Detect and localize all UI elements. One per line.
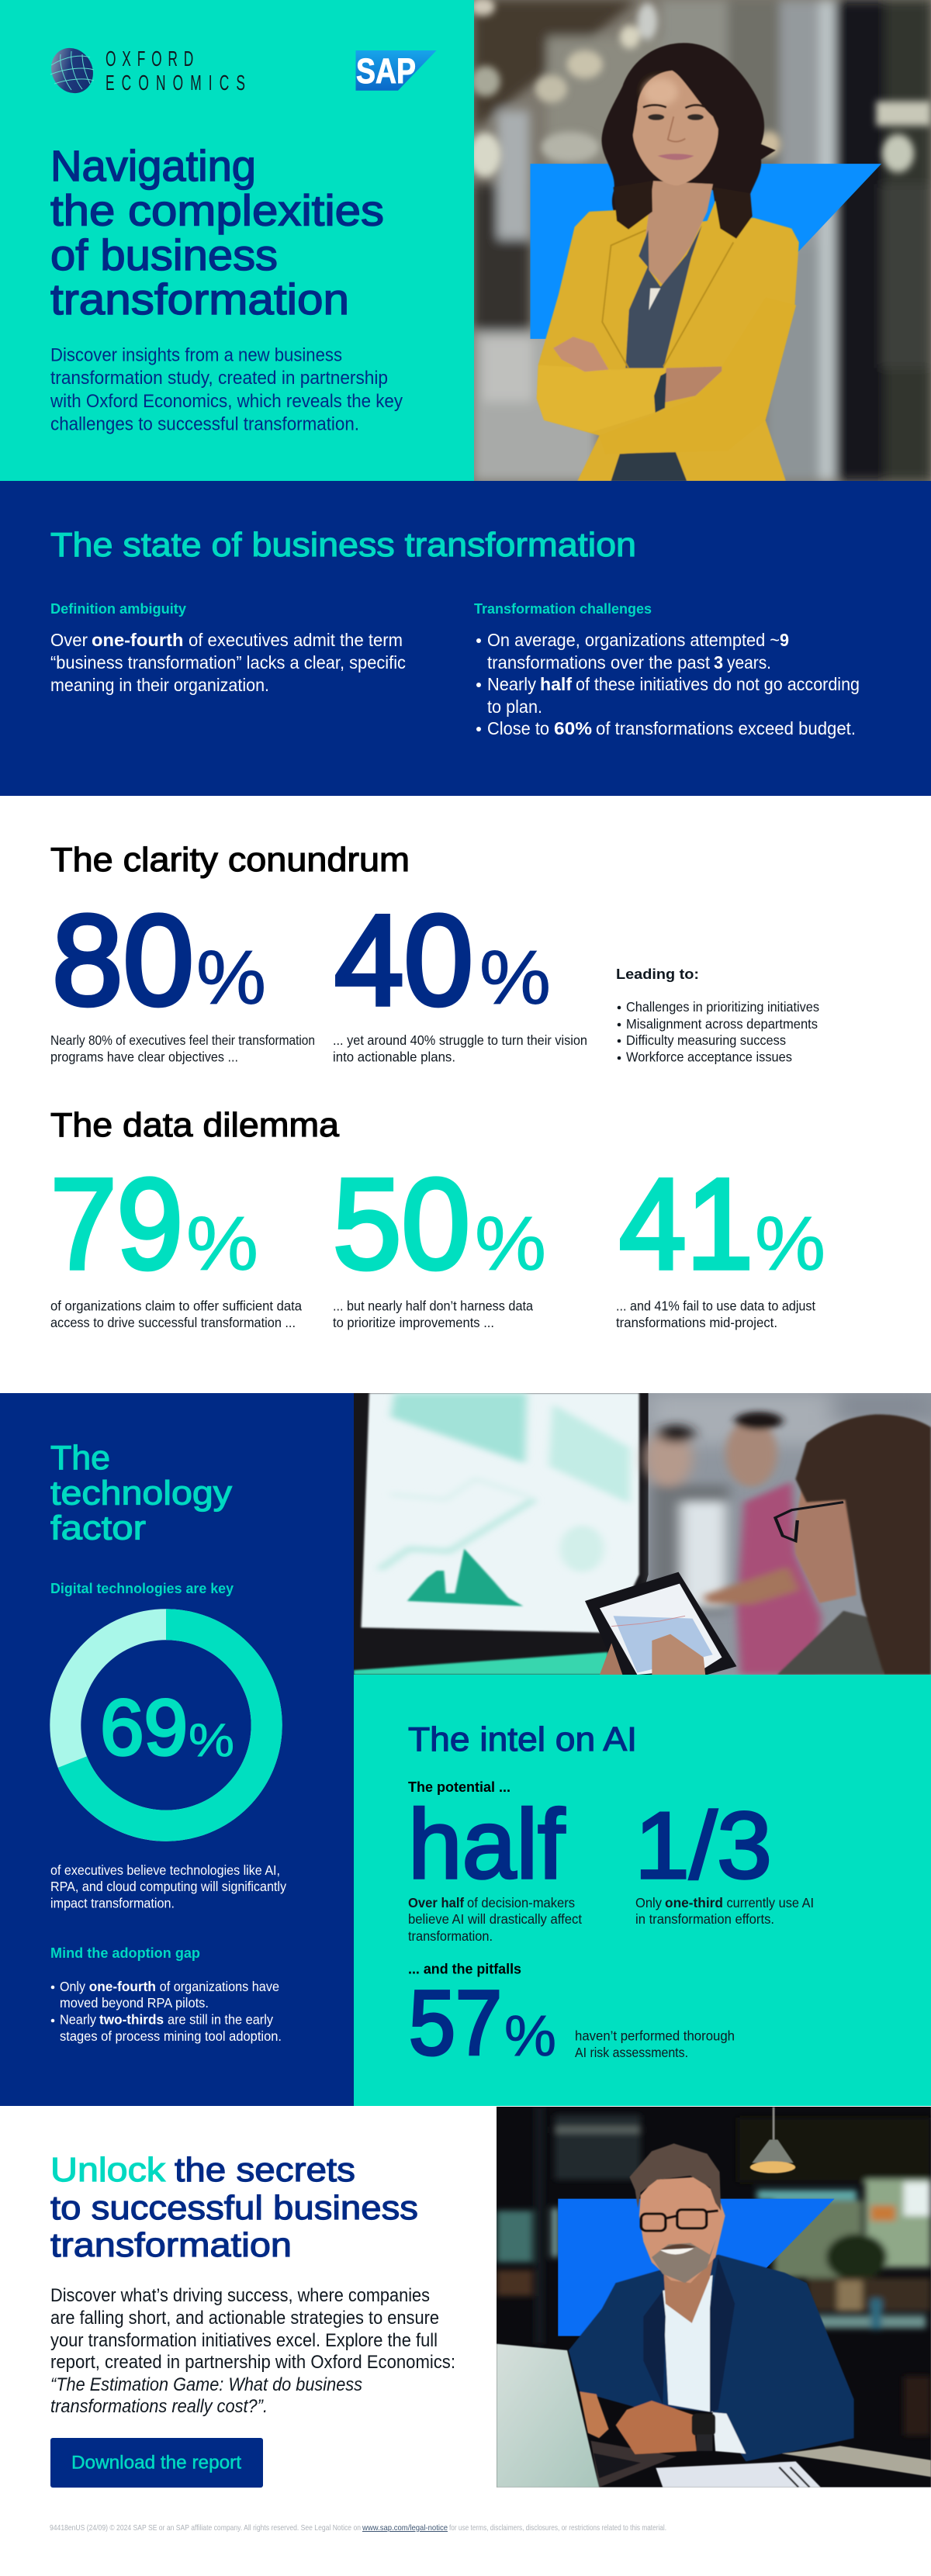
panel: the technology factor xyxy=(0,1393,354,2106)
heading: Unlock xyxy=(50,2151,166,2189)
person: front hair locks xyxy=(614,181,753,239)
donut chart: 69%: 69 xyxy=(100,1683,188,1772)
heading: The data dilemma xyxy=(50,1106,340,1144)
title: the complexities xyxy=(50,186,384,234)
stat: 50%: % xyxy=(475,1201,546,1286)
person: hands and watch xyxy=(580,2391,746,2454)
list: leading to xyxy=(616,966,819,1064)
stat: 80% xyxy=(50,889,315,1064)
intro paragraph: Discover insights from a new business xyxy=(50,344,342,366)
stat: 40%: 40 xyxy=(334,889,473,1032)
stat: half: Over half xyxy=(408,1895,464,1910)
list: adoption gap: moved beyond RPA pilots. xyxy=(60,1995,209,2011)
heading: technology xyxy=(50,1474,232,1513)
person: businesswoman xyxy=(537,43,799,481)
title: of business xyxy=(50,230,278,279)
heading: The xyxy=(50,1439,110,1477)
stat: 41%: 41 xyxy=(619,1153,753,1296)
person: neck xyxy=(646,181,713,285)
person: blouse xyxy=(611,226,702,481)
stat: 80%: Nearly 80% of executives feel their transformation xyxy=(50,1032,315,1048)
subheading: ... and the pitfalls xyxy=(408,1961,521,1976)
colleague in pink xyxy=(704,1412,822,1675)
text block: report description xyxy=(50,2285,455,2417)
stat: 50%: 50 xyxy=(333,1153,470,1296)
donut chart: 69% xyxy=(65,1624,267,1826)
stat: 40%: into actionable plans. xyxy=(333,1049,455,1064)
stat: 41%: % xyxy=(755,1201,825,1286)
stat: half: half xyxy=(408,1789,566,1899)
text block: transformation challenges xyxy=(474,601,860,738)
list: adoption gap: two-thirds xyxy=(99,2012,164,2028)
text block: executives belief xyxy=(50,1862,286,1911)
text block: report description: “The Estimation Game: What do business xyxy=(50,2374,362,2395)
button: download the report xyxy=(50,2438,263,2488)
section: the data dilemma xyxy=(50,1106,825,1330)
panel: the intel on AI xyxy=(354,1675,931,2106)
title: Navigating xyxy=(50,141,256,190)
stat: 80%: % xyxy=(196,935,266,1020)
list: leading to: Leading to: xyxy=(616,966,699,982)
stat: one third: in transformation efforts. xyxy=(635,1911,774,1927)
stat: 80%: programs have clear objectives ... xyxy=(50,1049,238,1064)
text block: report description: your transformation initiatives excel. Explore the full xyxy=(50,2330,438,2351)
footer: legal notice: 94418enUS (24/09) © 2024 SAP SE or an SAP affiliate company. All rights reserved. See Legal Notice on xyxy=(50,2523,361,2533)
stat: half xyxy=(408,1789,582,1944)
panel: the state of business transformation xyxy=(0,481,931,796)
text block: definition ambiguity xyxy=(50,601,406,695)
list: adoption gap: are still in the early xyxy=(168,2012,273,2028)
text block: report description: transformations really cost?”. xyxy=(50,2396,268,2417)
stat: 80%: 80 xyxy=(52,889,194,1032)
stat: 57%: AI risk assessments. xyxy=(575,2045,688,2060)
lamp xyxy=(750,2107,795,2173)
person: jacket xyxy=(569,2255,854,2461)
text block: transformation challenges: Close to xyxy=(487,718,549,738)
text block: definition ambiguity: Over xyxy=(50,630,88,650)
person: businessman xyxy=(497,2143,931,2488)
person: hair xyxy=(600,42,776,211)
person: shirt and lapels xyxy=(643,2257,735,2412)
stat: 79%: of organizations claim to offer sufficient data xyxy=(50,1298,302,1314)
stat: 79%: 79 xyxy=(50,1153,183,1296)
logo: Oxford Economics xyxy=(43,40,252,101)
subheading: Mind the adoption gap xyxy=(50,1945,200,1961)
text block: transformation challenges: of these initiatives do not go according xyxy=(576,674,860,694)
person: crossed arms xyxy=(537,298,796,454)
person: blazer lapel lines xyxy=(602,230,733,368)
stat: one third: one-third xyxy=(665,1895,723,1910)
colleague in vest xyxy=(645,1425,729,1613)
title xyxy=(50,141,384,323)
icon: globe xyxy=(43,40,101,101)
heading: The intel on AI xyxy=(408,1720,637,1758)
list: adoption gap: Nearly xyxy=(60,2012,96,2028)
stat: one third: Only xyxy=(635,1895,662,1910)
heading: the secrets xyxy=(175,2151,355,2189)
list: adoption gap xyxy=(51,1979,282,2044)
text block: executives belief: RPA, and cloud computing will significantly xyxy=(50,1879,286,1894)
stat: 57%: 57 xyxy=(409,1972,502,2074)
title: transformation xyxy=(50,275,349,323)
text block: executives belief: of executives believe technologies like AI, xyxy=(50,1862,280,1878)
stat: 50%: to prioritize improvements ... xyxy=(333,1315,494,1330)
text block: transformation challenges: 9 xyxy=(780,630,789,650)
panel: hero teal background xyxy=(0,0,474,481)
photo: team reviewing data on a screen and tablet xyxy=(354,1393,931,1675)
text block: transformation challenges: half xyxy=(540,674,572,694)
button: download the report: Download the report xyxy=(71,2453,241,2473)
person: blazer xyxy=(537,199,799,481)
heading: The clarity conundrum xyxy=(50,841,410,879)
woman with glasses xyxy=(775,1414,931,1675)
stat: 50%: ... but nearly half don’t harness data xyxy=(333,1298,533,1314)
text block: definition ambiguity: one-fourth xyxy=(92,630,183,650)
heading: transformation xyxy=(50,2226,292,2264)
logo: Oxford Economics: OXFORD xyxy=(106,47,199,71)
heading: The state of business transformation xyxy=(50,526,636,564)
text block: report description: Discover what’s driving success, where companies xyxy=(50,2285,430,2306)
text block: transformation challenges: of transformations exceed budget. xyxy=(596,718,856,738)
text block: definition ambiguity: meaning in their organization. xyxy=(50,675,269,695)
section: unlock the secrets call to action xyxy=(50,2151,455,2488)
text block: transformation challenges: transformations over the past xyxy=(487,652,711,673)
subheading: Digital technologies are key xyxy=(50,1581,234,1596)
arrow: blue brand wedge xyxy=(558,2199,835,2336)
heading: factor xyxy=(50,1509,146,1547)
text block: transformation challenges: 3 xyxy=(714,652,723,673)
list: adoption gap: Only xyxy=(60,1979,85,1994)
text block: definition ambiguity: of executives admit the term xyxy=(189,630,403,650)
stat: 79%: % xyxy=(186,1201,258,1286)
list: adoption gap: one-fourth xyxy=(89,1979,156,1994)
person: face xyxy=(633,71,718,185)
text block: report description: report, created in partnership with Oxford Economics: xyxy=(50,2352,455,2373)
text block: transformation challenges: to plan. xyxy=(487,697,542,717)
tablet xyxy=(585,1572,736,1675)
intro paragraph: challenges to successful transformation. xyxy=(50,414,359,434)
intro paragraph xyxy=(50,344,403,434)
stat: 57%: % xyxy=(504,2004,556,2068)
subheading: The potential ... xyxy=(408,1779,510,1795)
footer: legal notice: for use terms, disclaimers, disclosures, or restrictions related to this material. xyxy=(449,2523,666,2533)
list: leading to: Difficulty measuring success xyxy=(626,1032,786,1048)
stat: 79%: access to drive successful transformation ... xyxy=(50,1315,296,1330)
intro paragraph: transformation study, created in partnership xyxy=(50,368,388,389)
text block: transformation challenges: 60% xyxy=(554,718,592,738)
logo: SAP: SAP xyxy=(356,51,416,91)
stat: one third: 1/3 xyxy=(635,1793,772,1898)
desk and papers xyxy=(656,2446,931,2488)
wall screen with chart xyxy=(361,1393,639,1633)
logo: Oxford Economics: ECONOMICS xyxy=(106,71,252,95)
stat: 41%: transformations mid-project. xyxy=(616,1315,777,1330)
stat: 41%: ... and 41% fail to use data to adjust xyxy=(616,1298,815,1314)
stat: half: believe AI will drastically affect xyxy=(408,1911,582,1927)
stat: half: transformation. xyxy=(408,1928,493,1944)
stat: 40%: ... yet around 40% struggle to turn their vision xyxy=(333,1032,587,1048)
heading: to successful business xyxy=(50,2189,418,2227)
laptop xyxy=(497,2344,677,2488)
list: leading to: Challenges in prioritizing initiatives xyxy=(626,999,819,1015)
donut chart: 69%: % xyxy=(189,1714,234,1766)
list: adoption gap: stages of process mining tool adoption. xyxy=(60,2028,282,2044)
heading xyxy=(50,1439,232,1547)
text block: transformation challenges: years. xyxy=(727,652,771,673)
list: leading to: Misalignment across departments xyxy=(626,1016,818,1032)
text block: executives belief: impact transformation. xyxy=(50,1896,175,1911)
heading xyxy=(50,2151,418,2264)
photo: businesswoman in yellow blazer xyxy=(469,0,931,481)
text block: report description: are falling short, and actionable strategies to ensure xyxy=(50,2308,439,2329)
photo: smiling businessman at laptop xyxy=(497,2107,931,2488)
list: adoption gap: of organizations have xyxy=(160,1979,279,1994)
arrow: blue brand wedge xyxy=(530,164,881,339)
text block: definition ambiguity: “business transformation” lacks a clear, specific xyxy=(50,652,406,673)
stat: 57% xyxy=(409,1972,735,2074)
stat: 40%: % xyxy=(479,935,551,1020)
text block: definition ambiguity: Definition ambiguity xyxy=(50,601,186,617)
stat: 40% xyxy=(333,889,587,1064)
text block: transformation challenges: Transformation challenges xyxy=(474,601,652,617)
stat: half: of decision-makers xyxy=(467,1895,575,1910)
stat: one third xyxy=(635,1793,814,1927)
stat: 79% xyxy=(50,1153,302,1330)
person: head xyxy=(629,2143,725,2323)
footer: legal notice: www.sap.com/legal-notice xyxy=(362,2523,448,2533)
list: leading to: Workforce acceptance issues xyxy=(626,1049,792,1064)
stat: one third: currently use AI xyxy=(726,1895,814,1910)
stat: 41% xyxy=(616,1153,825,1330)
intro paragraph: with Oxford Economics, which reveals the key xyxy=(50,391,403,412)
text block: transformation challenges: On average, organizations attempted ~ xyxy=(487,630,780,650)
section: the clarity conundrum xyxy=(50,841,819,1064)
text block: transformation challenges: Nearly xyxy=(487,674,536,694)
screen frame xyxy=(354,1393,649,1675)
stat: 57%: haven’t performed thorough xyxy=(575,2028,735,2043)
stat: 50% xyxy=(333,1153,546,1330)
